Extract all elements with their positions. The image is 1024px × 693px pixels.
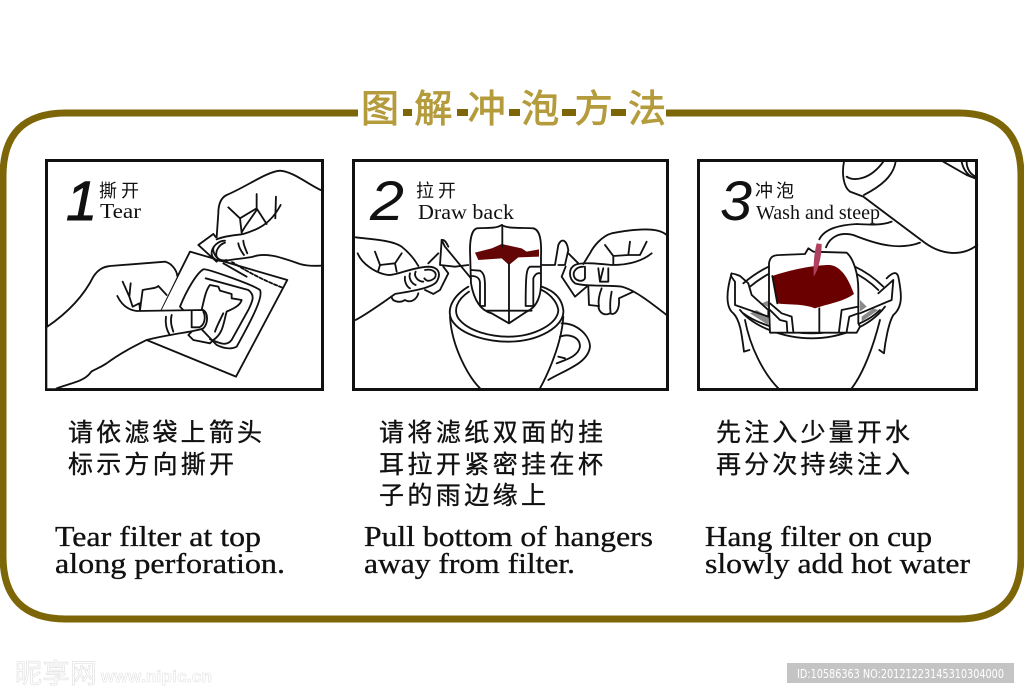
number 1: 1 [66,169,97,232]
title: 图解冲泡方法 [361,89,666,131]
text: step 2 chinese [379,419,603,510]
watermark: site name: www.nipic.cn [100,667,212,686]
text: step 1 chinese: 请依滤袋上箭头 [68,419,262,447]
panel: step 2 draw back [354,160,668,390]
step subheading: Wash and steep [756,202,880,224]
id stamp [787,663,1014,683]
text: step 1 english: Tear filter at top [55,521,261,553]
text: step 3 chinese: 再分次持续注入 [716,451,910,479]
step subheading: Tear [100,199,141,223]
text: step 2 chinese: 请将滤纸双面的挂 [379,419,603,447]
text: step 2 english [364,521,653,580]
number 2: 2 [369,169,404,232]
text: step 3 chinese [716,419,910,479]
illustration: hands pulling hangers over cup [356,225,667,388]
text: step 1 chinese [68,419,262,479]
step heading: 撕开 [99,181,139,201]
number 3: 3 [720,169,752,232]
text: step 3 english: slowly add hot water [705,548,970,580]
text: step 2 chinese: 子的雨边缘上 [379,482,546,510]
step heading: 拉开 [416,181,456,201]
text: step 2 chinese: 耳拉开紧密挂在杯 [379,451,603,479]
panel: step 1 tear [46,160,322,390]
text: step 1 english [55,521,285,580]
step heading: 冲泡 [755,181,794,201]
illustration: hands tearing filter bag [47,171,321,388]
watermark: site name [15,659,212,689]
watermark: site name: 昵享网 [15,659,97,689]
text: step 1 chinese: 标示方向撕开 [68,451,234,479]
illustration: kettle pouring into filter on cup [727,162,977,388]
text: step 3 english [705,521,970,580]
text: step 2 english: Pull bottom of hangers [364,521,653,553]
text: step 3 english: Hang filter on cup [705,521,932,553]
step subheading: Draw back [418,200,515,224]
panel: step 3 wash and steep [698,160,977,390]
text: step 3 chinese: 先注入少量开水 [716,419,910,447]
text: step 1 english: along perforation. [55,548,285,580]
outer rounded border [3,113,1021,619]
text: step 2 english: away from filter. [364,548,575,580]
